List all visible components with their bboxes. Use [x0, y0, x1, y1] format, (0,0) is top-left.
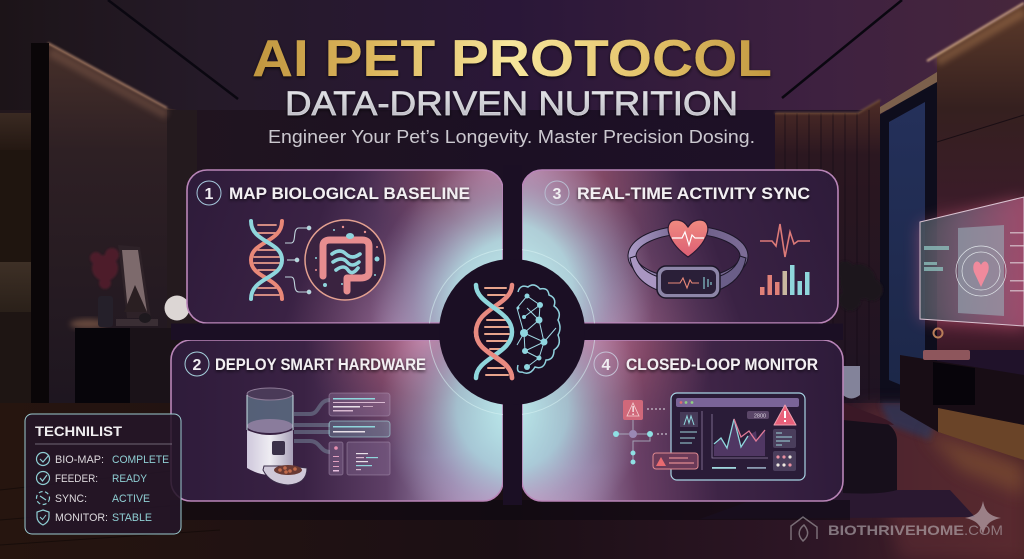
status row: bio-map: [36, 452, 169, 466]
cross gap: [171, 165, 843, 505]
line chart: [714, 419, 765, 456]
bar chart: [760, 265, 810, 295]
panel 4: closed-loop monitor: [522, 340, 843, 501]
ottoman: [843, 405, 897, 494]
icon: sparkle: [965, 501, 1001, 535]
watermark logo: .COM: [964, 522, 1003, 538]
status row: feeder: READY: [112, 473, 148, 485]
icon: smart feeder: [247, 388, 307, 485]
status row: monitor: MONITOR:: [55, 512, 108, 524]
tagline: Engineer Your Pet’s Longevity. Master Precision Dosing.: [268, 126, 755, 147]
icon: pulse line: [760, 224, 810, 257]
right window: [880, 72, 937, 405]
watermark logo: [791, 501, 1003, 541]
monitor dashboard: [671, 393, 805, 480]
center hub: [171, 165, 843, 505]
title: AI PET PROTOCOL: [252, 30, 772, 88]
icon: DNA helix: [251, 221, 282, 299]
right sideboard: [900, 328, 1024, 460]
node diagram: [613, 420, 653, 464]
status row: feeder: [36, 472, 148, 485]
step number 2: 2: [193, 357, 202, 374]
heart: [668, 220, 708, 257]
console with decor: [70, 245, 190, 410]
status row: monitor: [37, 510, 152, 525]
connectors to data cards: [294, 400, 330, 452]
status row: sync: SYNC:: [55, 493, 87, 505]
callout: technilist status panel: [25, 414, 181, 534]
step number 2: [185, 352, 209, 376]
black pillar: [31, 43, 49, 559]
heading 3: REAL-TIME ACTIVITY SYNC: [577, 184, 810, 203]
dotted connectors: [647, 409, 667, 434]
floor left boards: [0, 470, 220, 545]
floor: [0, 403, 1024, 559]
icon: central DNA helix: [476, 285, 512, 378]
status row: sync: [36, 492, 150, 505]
heading 2: DEPLOY SMART HARDWARE: [215, 355, 426, 374]
left wall: [48, 43, 187, 403]
heading 1: MAP BIOLOGICAL BASELINE: [229, 184, 470, 203]
panel 2: deploy smart hardware: [171, 340, 503, 501]
icon: gut microbiome circle: [305, 220, 385, 300]
status row: feeder: FEEDER:: [55, 473, 98, 485]
site name: BIOTHRIVEHOME: [828, 522, 964, 538]
monitor dashboard: 2800: [754, 414, 766, 420]
step number 1: [197, 181, 221, 205]
left recess: [0, 113, 31, 403]
icon: alert square: [623, 400, 643, 420]
status row: bio-map: BIO-MAP:: [55, 454, 104, 466]
connectors: [285, 226, 311, 294]
holographic wall screen: [920, 197, 1024, 328]
panel 3: real-time activity sync: [522, 170, 838, 323]
right wall: [927, 3, 1024, 350]
step number 4: [594, 352, 618, 376]
step number 3: [545, 181, 569, 205]
icon: wearable band with heart: [630, 220, 746, 298]
subtitle: DATA-DRIVEN NUTRITION: [285, 85, 738, 123]
status row: bio-map: COMPLETE: [112, 454, 169, 466]
icon: house with leaf: [791, 517, 817, 541]
icon: neural brain: [516, 285, 560, 373]
status row: sync: ACTIVE: [112, 493, 150, 505]
step number 1: 1: [205, 186, 214, 203]
data cards: [329, 393, 390, 475]
right curtain: [775, 100, 880, 405]
alert card: [653, 453, 698, 469]
rug: [700, 490, 975, 519]
status heading: TECHNILIST: [35, 423, 122, 439]
heading 4: CLOSED-LOOP MONITOR: [626, 355, 818, 374]
step number 4: 4: [602, 357, 611, 374]
ceiling track lights: [108, 0, 902, 99]
status row: monitor: STABLE: [112, 512, 152, 524]
plant and pot: [836, 261, 883, 398]
step number 3: 3: [553, 186, 562, 203]
panel 1: map biological baseline: [187, 170, 503, 323]
